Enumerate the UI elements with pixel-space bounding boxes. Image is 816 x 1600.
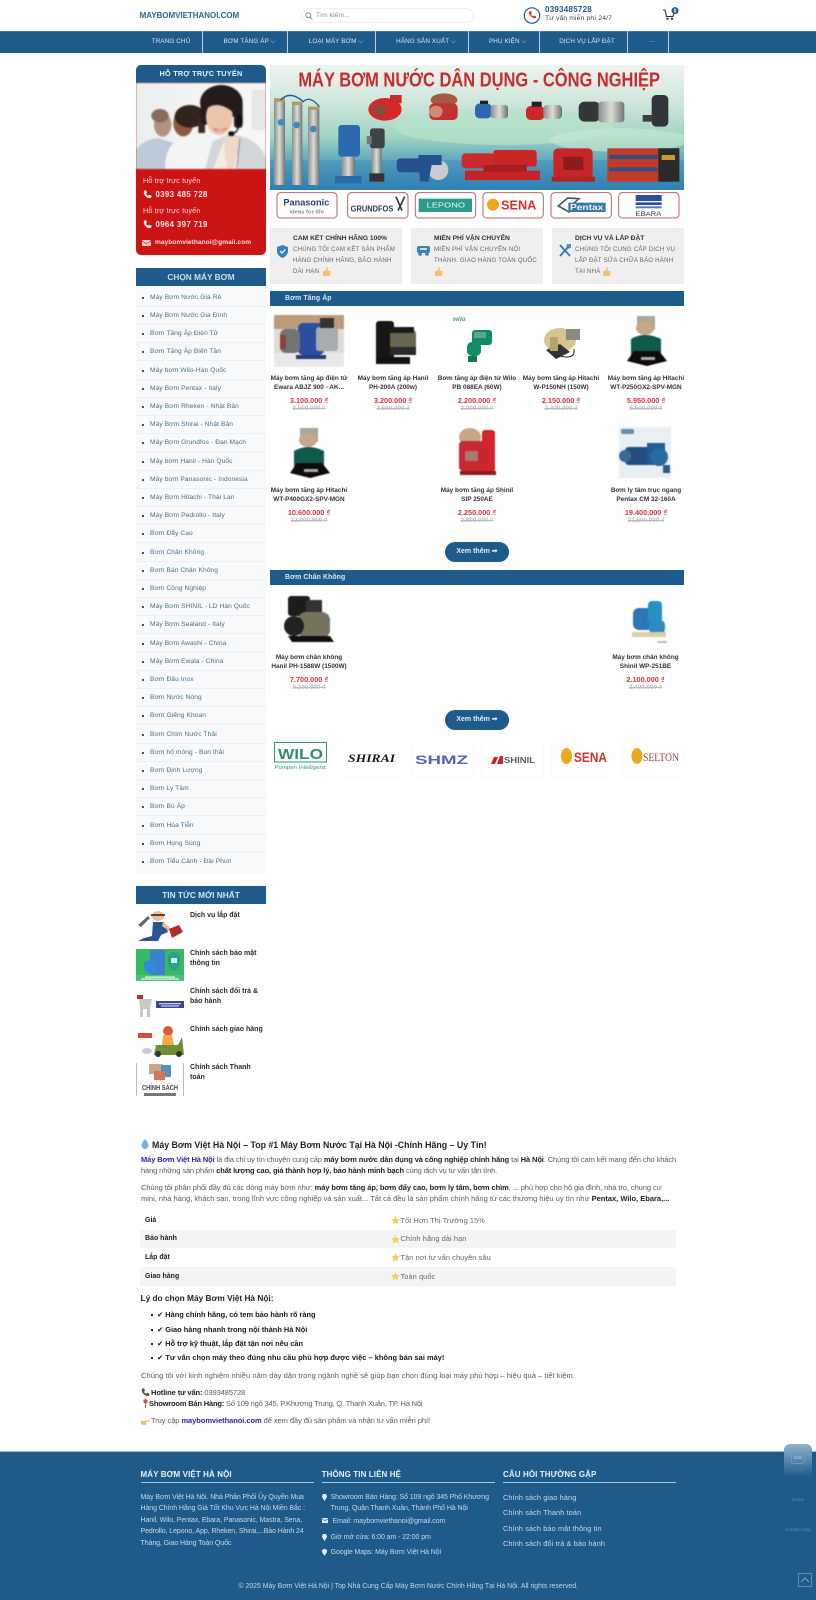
contact hours: Giờ mở cửa: 6:00 am - 22:00 pm bbox=[331, 1534, 431, 1540]
news heading bbox=[136, 886, 266, 904]
section heading: vacuum pumps bbox=[270, 570, 684, 585]
product name bbox=[350, 374, 436, 392]
category list: Máy Bơm Nước Giá Rẻ bbox=[150, 294, 221, 301]
floating contact widget bbox=[784, 1444, 812, 1540]
red fire pump bbox=[552, 148, 595, 182]
icon: tools bbox=[559, 244, 571, 257]
thumbnail: security shields bbox=[136, 949, 184, 981]
category list: Bơm Giếng Khoan bbox=[150, 712, 206, 719]
brand logos row: LEPONO bbox=[427, 201, 465, 210]
category list bbox=[136, 294, 266, 865]
news title: Chính sách đổi trả & bbox=[190, 988, 258, 995]
product name: Bơm tăng áp điện tử Wilo bbox=[438, 375, 516, 382]
old price: 6.500.000 ₫ bbox=[630, 405, 662, 412]
product name: WT-P250GX2-SPV-MGN bbox=[610, 384, 682, 391]
contact email bbox=[322, 1515, 495, 1527]
header bar bbox=[0, 0, 816, 31]
product name: SIP 250AE bbox=[461, 496, 493, 503]
news title bbox=[190, 950, 257, 967]
logo: Shirai bbox=[341, 739, 403, 777]
panel: genuine commitment bbox=[270, 228, 402, 284]
category list: Bơm Chân Không bbox=[150, 548, 204, 556]
logo: Shinil: SHINIL bbox=[504, 755, 535, 765]
product name bbox=[603, 486, 689, 504]
contact map bbox=[322, 1547, 495, 1559]
category list: Bơm Đầu Inox bbox=[150, 676, 194, 683]
footer column: FAQ bbox=[503, 1475, 676, 1547]
price: 2.100.000 ₫ bbox=[626, 675, 665, 684]
product: Hanil PH-200A bbox=[354, 315, 432, 417]
company description: Hanil, Wilo, Pentax, Ebara, Panasonic, Mastra, Sena, bbox=[140, 1517, 302, 1524]
price: 10.600.000 ₫ bbox=[288, 508, 330, 516]
category list: Máy Bơm Pedrollo - Italy bbox=[150, 512, 225, 519]
benefits table bbox=[0, 1211, 816, 1286]
phone number 1: 0393 485 728 bbox=[156, 190, 208, 199]
logo: Selton bbox=[622, 739, 684, 777]
brand logo strip bbox=[270, 738, 684, 778]
product name bbox=[518, 374, 604, 392]
product name: Bơm ly tâm trục ngang bbox=[611, 487, 681, 494]
product name: Máy bơm tăng áp Shinil bbox=[441, 487, 513, 494]
FAQ links: Chính sách đổi trả & bảo hành bbox=[503, 1539, 605, 1548]
shipping body: THÀNH. GIAO HÀNG TOÀN QUỐC bbox=[434, 257, 537, 264]
news title: Dịch vụ lắp đặt bbox=[190, 912, 240, 919]
category list: Máy bơm Wilo-Hàn Quốc bbox=[150, 366, 226, 374]
news title: Chính sách Thanh bbox=[190, 1064, 251, 1071]
button: see more vacuum pumps: Xem thêm ➡ bbox=[456, 716, 498, 723]
hotline line: Hotline tư vấn: 0393485728 bbox=[151, 1388, 245, 1397]
footer column: contact bbox=[322, 1475, 495, 1561]
product name: Máy bơm chân không bbox=[276, 654, 342, 661]
logo: SHMZ: SHMZ bbox=[415, 753, 468, 767]
category list: Bơm Chìm Nước Thải bbox=[150, 730, 217, 738]
price: 2.200.000 ₫ bbox=[458, 396, 496, 404]
product name bbox=[271, 375, 348, 391]
company description: Pedrollo, Lepono, App, Rheken, Shirai,...Bảo Hành 24 bbox=[140, 1528, 304, 1535]
article second paragraph: mini, nhà hàng, khách sạn, trong lĩnh vực công nghiệp và sản xuất... Tất cả đều là sản phẩm chính hãng từ các thương hiệu uy tín như Pentax, Wilo, Ebara,... bbox=[141, 1194, 669, 1203]
hotline caption: Tư vấn miễn phí 24/7 bbox=[545, 15, 612, 22]
old price: 12.000.000 ₫ bbox=[291, 517, 327, 524]
brand logos row: ideas for life bbox=[289, 209, 324, 215]
chat tile caption: Chat bbox=[793, 1467, 803, 1472]
category list: Máy Bơm Sealand - Italy bbox=[150, 621, 225, 628]
category list: Máy Bơm Grundfos - Đan Mạch bbox=[150, 439, 246, 446]
product photo bbox=[273, 314, 345, 367]
hotline number: 0393485728 bbox=[545, 5, 592, 14]
thumbnail: returns banner bbox=[137, 995, 184, 1017]
news title: Chính sách bảo mật bbox=[190, 950, 257, 957]
category list: Bơm hố móng - Bùn thải bbox=[150, 749, 224, 756]
photo: support team bbox=[136, 82, 266, 170]
category list: Bơm Ly Tâm bbox=[150, 785, 189, 792]
banner: hero pumps and brands bbox=[270, 65, 684, 218]
icon: truck bbox=[417, 246, 430, 256]
product photo bbox=[606, 594, 685, 646]
brand logos row: GRUNDFOS bbox=[351, 203, 394, 213]
product photo bbox=[438, 427, 516, 479]
FAQ links bbox=[503, 1485, 676, 1545]
brand logos row bbox=[277, 193, 679, 218]
category list: Máy bơm Hanil - Hàn Quốc bbox=[150, 458, 233, 464]
category list: Bơm Tăng Áp Điện Tử bbox=[150, 330, 218, 337]
support caption 1: Hỗ trợ trực tuyến bbox=[143, 176, 201, 185]
product photo bbox=[607, 427, 685, 479]
product: Shinil WP-251BE bbox=[606, 594, 685, 696]
brand logos row: Panasonic bbox=[283, 197, 329, 207]
shipping body: MIỄN PHÍ VẬN CHUYỂN NỘI bbox=[434, 246, 520, 253]
commitment body: HÀNG CHÍNH HÃNG, BẢO HÀNH bbox=[293, 257, 392, 264]
product name: W-P150NH (150W) bbox=[533, 384, 589, 391]
news title: Chính sách giao hàng bbox=[190, 1026, 263, 1033]
brand logos row: Pentax bbox=[570, 203, 604, 212]
section heading: booster pumps: Bơm Tăng Áp bbox=[285, 295, 332, 302]
service body: LẮP ĐẶT SỬA CHỮA BẢO HÀNH bbox=[575, 257, 673, 264]
vertical pumps bbox=[335, 125, 385, 183]
category list: Bơm Họng Súng bbox=[150, 840, 200, 847]
email address: maybomviethanoi@gmail.com bbox=[155, 239, 251, 246]
nav dividers and items bbox=[152, 31, 669, 53]
article second paragraph bbox=[141, 1181, 677, 1205]
panel: latest news bbox=[136, 886, 266, 1096]
control cabinet bbox=[607, 148, 679, 182]
category list: Máy Bơm Ewala - China bbox=[150, 658, 223, 665]
product photo: wilo bbox=[453, 316, 466, 323]
product name: Máy bơm tăng áp Hitachi bbox=[523, 375, 599, 382]
nav dividers and items: PHỤ KIỆN ⌵ bbox=[489, 38, 526, 45]
icon: telephone bbox=[141, 1388, 150, 1396]
old price: 21.500.000 ₫ bbox=[628, 517, 664, 524]
article intro paragraph bbox=[141, 1153, 677, 1177]
panel: free shipping bbox=[411, 228, 543, 284]
news item: payment policy bbox=[136, 1063, 251, 1096]
icon: water drop bbox=[141, 1139, 149, 1149]
widget: chat tile bbox=[784, 1444, 812, 1477]
old price: 3.000.000 ₫ bbox=[460, 405, 494, 412]
old price: 3.500.000 ₫ bbox=[376, 405, 410, 412]
reasons list bbox=[140, 1308, 460, 1366]
nav dividers and items: LOẠI MÁY BƠM ⌵ bbox=[309, 38, 363, 45]
category list: Bơm Đẩy Cao bbox=[150, 530, 193, 537]
product photo bbox=[522, 315, 600, 367]
news title: thông tin bbox=[190, 960, 220, 967]
contact showroom bbox=[322, 1485, 495, 1511]
product photo bbox=[375, 320, 417, 365]
nav dividers and items: TRANG CHỦ bbox=[152, 38, 190, 45]
price: 7.700.000 ₫ bbox=[290, 675, 328, 684]
contact showroom: Trung, Quận Thanh Xuân, Thành Phố Hà Nội bbox=[331, 1505, 468, 1512]
price: 3.200.000 ₫ bbox=[374, 396, 412, 404]
product name bbox=[266, 486, 352, 504]
news item: delivery policy bbox=[138, 1026, 263, 1057]
news title: bảo hành bbox=[190, 998, 221, 1005]
category list: Bơm Bù Áp bbox=[150, 803, 185, 810]
old price: 3.500.000 ₫ bbox=[292, 405, 326, 412]
product name: WT-P400GX2-SPV-MGN bbox=[273, 496, 345, 503]
icon: phone circle bbox=[524, 7, 540, 24]
copyright: © 2025 Máy Bơm Việt Hà Nội | Top Nhà Cung Cấp Máy Bơm Nước Chính Hãng Tại Hà Nội. All rights reserved. bbox=[238, 1583, 578, 1590]
news heading: TIN TỨC MỚI NHẤT bbox=[162, 890, 240, 900]
service body: TẠI NHÀ bbox=[575, 268, 601, 275]
price: 2.150.000 ₫ bbox=[542, 396, 580, 404]
logo: Wilo: WILO bbox=[278, 746, 323, 763]
site logo: MAYBOMVIETHANOI.COM bbox=[140, 10, 239, 20]
product name bbox=[434, 486, 520, 504]
logo: Sena: SENA bbox=[574, 749, 607, 765]
nav dividers and items: ··· bbox=[648, 38, 655, 45]
phone number 2: 0964 397 719 bbox=[156, 220, 208, 229]
product name: Máy bơm tăng áp điện tử bbox=[271, 375, 347, 382]
icon: thumbs up bbox=[435, 267, 443, 276]
nav dividers and items: HÃNG SẢN XUẤT ⌵ bbox=[396, 38, 456, 45]
panel: pump categories bbox=[136, 268, 266, 873]
article intro paragraph: hàng những sản phẩm chất lượng cao, giá thành hợp lý, bảo hành minh bạch cùng dịch vụ tư vấn tận tình. bbox=[141, 1166, 497, 1175]
service title: DỊCH VỤ VÀ LẮP ĐẶT bbox=[575, 235, 644, 242]
footer column: company bbox=[140, 1475, 314, 1547]
category list: Máy Bơm Awashi - China bbox=[150, 640, 226, 646]
call to action text: Truy cập maybomviethanoi.com để xem đầy đủ sản phẩm và nhận tư vấn miễn phí! bbox=[151, 1416, 430, 1425]
category list: Bơm Tăng Áp Biến Tần bbox=[150, 348, 221, 355]
support heading: HỖ TRỢ TRỰC TUYẾN bbox=[159, 69, 242, 78]
icon: thumbs up bbox=[603, 267, 611, 276]
reasons list: ✔ Giao hàng nhanh trong nội thành Hà Nội bbox=[157, 1325, 307, 1334]
reasons list: ✔ Hàng chính hãng, có tem bảo hành rõ ràng bbox=[157, 1310, 316, 1319]
button: see more booster pumps: Xem thêm ➡ bbox=[456, 548, 498, 555]
product photo bbox=[438, 315, 516, 367]
category list: Bơm Tiểu Cảnh - Đài Phun bbox=[150, 858, 232, 865]
commitment body: DÀI HẠN bbox=[293, 268, 319, 275]
news title bbox=[190, 1064, 251, 1081]
news title bbox=[190, 987, 258, 1005]
product: Hitachi WT-P250GX2 bbox=[607, 315, 685, 417]
category list: Bơm Công Nghiệp bbox=[150, 585, 206, 592]
price: 5.950.000 ₫ bbox=[627, 396, 665, 404]
benefits table: Tốt Hơn Thị Trường 15% bbox=[400, 1216, 485, 1224]
news item: returns policy bbox=[137, 987, 258, 1017]
category list: Máy Bơm Shirai - Nhật Bản bbox=[150, 421, 233, 428]
service body bbox=[575, 245, 675, 275]
product: Wilo PB 088EA bbox=[438, 315, 516, 417]
FAQ links: Chính sách bảo mật thông tin bbox=[503, 1524, 602, 1533]
icon: map pin bbox=[143, 1398, 148, 1408]
old price: 2.400.000 ₫ bbox=[544, 405, 578, 412]
benefits table: Tận nơi tư vấn chuyên sâu bbox=[400, 1253, 491, 1262]
icon: phone 1 bbox=[144, 190, 152, 198]
contact map: Google Maps: Máy Bơm Việt Hà Nội bbox=[331, 1549, 441, 1556]
icon: magnifier bbox=[305, 12, 313, 20]
surface pumps row bbox=[368, 93, 668, 127]
category list: Máy Bơm Hitachi - Thái Lan bbox=[150, 494, 234, 501]
support line 1 bbox=[143, 176, 208, 199]
product name: PH-200A (200w) bbox=[369, 384, 417, 391]
article intro paragraph: Máy Bơm Việt Hà Nội là địa chỉ uy tín chuyên cung cấp máy bơm nước dân dụng và công nghiệp chính hãng tại Hà Nội. Chúng tôi cam kết mang đến cho khách bbox=[141, 1155, 676, 1164]
red industrial pump bbox=[462, 150, 540, 180]
product: Hanil PH-1588W bbox=[270, 594, 348, 696]
brand logos row: SENA bbox=[501, 198, 536, 212]
icon: cart bbox=[663, 7, 678, 20]
logo: SHMZ bbox=[412, 739, 474, 777]
nav dividers and items: BƠM TĂNG ÁP ⌵ bbox=[223, 38, 276, 45]
category list: Máy Bơm Rheken - Nhật Bản bbox=[150, 403, 239, 410]
search box bbox=[301, 8, 474, 23]
product name: PB 088EA (60W) bbox=[452, 384, 502, 391]
product name: Máy bơm tăng áp Hitachi bbox=[608, 375, 684, 382]
product photo bbox=[270, 427, 348, 479]
product name bbox=[266, 653, 352, 671]
old price: 8.200.000 ₫ bbox=[292, 684, 326, 691]
icon: shield bbox=[277, 245, 288, 258]
categories heading bbox=[136, 268, 266, 286]
benefits table: Toàn quốc bbox=[400, 1272, 435, 1280]
product: Pentax CM 32-160A bbox=[607, 427, 685, 529]
product name: Máy bơm chân không bbox=[612, 654, 679, 661]
article heading bbox=[140, 1136, 490, 1152]
contact hours bbox=[322, 1531, 495, 1543]
product name bbox=[602, 653, 689, 671]
brand logos row: EBARA bbox=[635, 211, 662, 218]
company heading: MÁY BƠM VIỆT HÀ NỘI bbox=[140, 1470, 232, 1479]
back to top button bbox=[798, 1573, 812, 1587]
commitment title: CAM KẾT CHÍNH HÃNG 100% bbox=[293, 235, 387, 242]
category list: Máy Bơm Nước Gia Đình bbox=[150, 312, 227, 319]
showroom line: Showroom Bán Hàng: Số 109 ngõ 345, P.Khương Trung, Q. Thanh Xuân, TP. Hà Nội bbox=[149, 1399, 422, 1408]
product name: Hanil PH-1588W (1500W) bbox=[271, 663, 347, 670]
category list: Máy Bơm Pentax - Italy bbox=[150, 385, 221, 392]
price: 19.400.000 ₫ bbox=[625, 508, 667, 516]
category list: Bơm Bán Chân Không bbox=[150, 567, 218, 574]
commitment body: CHÚNG TÔI CAM KẾT SẢN PHẨM bbox=[293, 246, 395, 253]
product: Hitachi W-P150NH bbox=[522, 315, 600, 417]
icon: cart: 0 bbox=[674, 8, 677, 14]
icon: thumbs up bbox=[323, 267, 331, 276]
news item: privacy policy bbox=[136, 949, 257, 981]
news title: toán bbox=[190, 1074, 205, 1081]
heading text: Máy Bơm Việt Hà Nội – Top #1 Máy Bơm Nước Tại Hà Nội -Chính Hãng – Uy Tín! bbox=[152, 1140, 487, 1150]
support email bbox=[142, 239, 251, 246]
reasons heading: Lý do chọn Máy Bơm Việt Hà Nội: bbox=[140, 1293, 273, 1303]
company description: Hàng Chính Hãng Giá Tốt Khu Vực Hà Nội Miền Bắc : bbox=[140, 1505, 305, 1512]
category list: Bơm Nước Nóng bbox=[150, 694, 202, 701]
footer bbox=[0, 1451, 816, 1600]
panel: online support bbox=[136, 65, 266, 255]
widget: map label: Contact map bbox=[785, 1527, 811, 1532]
button: see more booster pumps bbox=[445, 542, 509, 562]
price: 3.100.000 ₫ bbox=[290, 396, 328, 404]
centrifugal pump blue bbox=[397, 155, 448, 182]
product name: Shinil WP-251BE bbox=[620, 663, 671, 670]
product photo bbox=[270, 594, 348, 646]
product name: Pentax CM 32-160A bbox=[616, 496, 676, 503]
news item: installation bbox=[138, 910, 240, 941]
logo: Shirai: SHIRAI bbox=[348, 751, 397, 765]
benefits table: Lắp đặt bbox=[145, 1254, 170, 1261]
nav dividers and items: DỊCH VỤ LẮP ĐẶT bbox=[559, 38, 615, 45]
product: Hitachi WT-P400GX2 bbox=[270, 427, 348, 529]
icon: envelope bbox=[142, 240, 151, 246]
category list: Máy bơm Panasonic - Indonesia bbox=[150, 476, 248, 483]
section heading: booster pumps bbox=[270, 291, 684, 306]
support caption 2: Hỗ trợ trực tuyến bbox=[143, 206, 201, 215]
old price: 2.800.000 ₫ bbox=[460, 517, 494, 524]
thumbnail: plumber bbox=[138, 911, 183, 941]
benefits table: Giao hàng bbox=[145, 1272, 179, 1280]
icon: phone 2 bbox=[144, 220, 152, 228]
product name bbox=[603, 374, 689, 392]
navigation bar bbox=[0, 31, 816, 53]
categories heading: CHỌN MÁY BƠM bbox=[167, 272, 235, 282]
widget: home label: Home bbox=[792, 1497, 804, 1502]
product photo bbox=[607, 315, 685, 367]
category list: Bơm Định Lượng bbox=[150, 767, 203, 774]
contact lines bbox=[141, 1386, 461, 1410]
icon: pointing hand bbox=[141, 1418, 150, 1425]
closing paragraph: Chúng tôi với kinh nghiệm nhiều năm dày dặn trong ngành nghề sẽ giúp bạn chọn đúng loại máy phù hợp – hiệu quả – tiết kiệm. bbox=[141, 1371, 575, 1380]
reasons list: ✔ Hỗ trợ kỹ thuật, lắp đặt tận nơi nếu cần bbox=[157, 1339, 303, 1348]
chat tile icon: Zalo bbox=[794, 1455, 802, 1460]
shipping body bbox=[434, 245, 537, 264]
button: see more vacuum pumps bbox=[445, 710, 509, 730]
panel: installation service bbox=[552, 228, 684, 284]
benefits table: Giá bbox=[145, 1216, 156, 1224]
section heading: vacuum pumps: Bơm Chân Không bbox=[285, 574, 345, 581]
FAQ heading: CÂU HỎI THƯỜNG GẶP bbox=[503, 1470, 596, 1479]
product name bbox=[434, 374, 520, 392]
benefits table: Chính hãng dài hạn bbox=[400, 1234, 466, 1243]
hotline block bbox=[524, 5, 612, 24]
company description: Tháng, Giao Hàng Toàn Quốc bbox=[140, 1540, 231, 1547]
shipping title: MIỄN PHÍ VẬN CHUYỂN bbox=[434, 235, 510, 242]
product name: Máy bơm tăng áp Hitachi bbox=[271, 487, 347, 494]
logo: Shinil bbox=[482, 739, 544, 777]
logo: Wilo bbox=[274, 742, 328, 771]
FAQ links: Chính sách giao hàng bbox=[503, 1493, 576, 1502]
article second paragraph: Chúng tôi phân phối đầy đủ các dòng máy bơm như: máy bơm tăng áp, bơm đẩy cao, bơm ly tâm, bơm chìm, ... phù hợp cho hộ gia đình, nhà trọ, chung cư bbox=[141, 1183, 662, 1192]
company description bbox=[140, 1485, 314, 1545]
old price: 2.400.000 ₫ bbox=[629, 684, 662, 691]
contact showroom: Showroom Bán Hàng: Số 109 ngõ 345 Phố Khương bbox=[331, 1494, 489, 1501]
support line 2 bbox=[143, 206, 208, 229]
product: Shinil SIP 250AE bbox=[438, 427, 516, 529]
call to action bbox=[141, 1415, 461, 1428]
service body: CHÚNG TÔI CUNG CẤP DỊCH VỤ bbox=[575, 246, 675, 253]
category list: Bơm Hỏa Tiễn bbox=[150, 822, 194, 828]
benefits table: Bảo hành bbox=[145, 1235, 177, 1242]
product name: Máy bơm tăng áp Hanil bbox=[358, 375, 428, 382]
logo: Sena bbox=[552, 739, 614, 777]
banner artwork bbox=[270, 65, 690, 190]
FAQ links: Chính sách Thanh toán bbox=[503, 1508, 581, 1517]
thumbnail: delivery scooter bbox=[138, 1026, 184, 1057]
support heading bbox=[136, 65, 266, 83]
logo: Wilo: Pumpen Intelligenz. bbox=[274, 765, 328, 771]
chat tile icon bbox=[791, 1451, 805, 1464]
product name: Ewara ABJZ 900 - AK... bbox=[274, 384, 344, 391]
contact heading: THÔNG TIN LIÊN HỆ bbox=[322, 1470, 401, 1479]
price: 2.250.000 ₫ bbox=[458, 508, 496, 516]
reasons list: ✔ Tư vấn chọn máy theo đúng nhu cầu phù hợp được việc – không bán sai máy! bbox=[157, 1353, 444, 1362]
category list: Máy Bơm SHINIL - LD Hàn Quốc bbox=[150, 603, 250, 610]
borehole pumps bbox=[274, 95, 319, 185]
commitment body bbox=[293, 245, 395, 275]
contact email: Email: maybomviethanoi@gmail.com bbox=[333, 1518, 445, 1525]
company description: Máy Bơm Việt Hà Nội. Nhà Phân Phối Ủy Quyền Mua bbox=[140, 1494, 304, 1501]
search placeholder: Tìm kiếm... bbox=[316, 12, 350, 18]
product: Ewara bbox=[270, 315, 348, 417]
thumbnail: payment policy bbox=[136, 1063, 184, 1096]
